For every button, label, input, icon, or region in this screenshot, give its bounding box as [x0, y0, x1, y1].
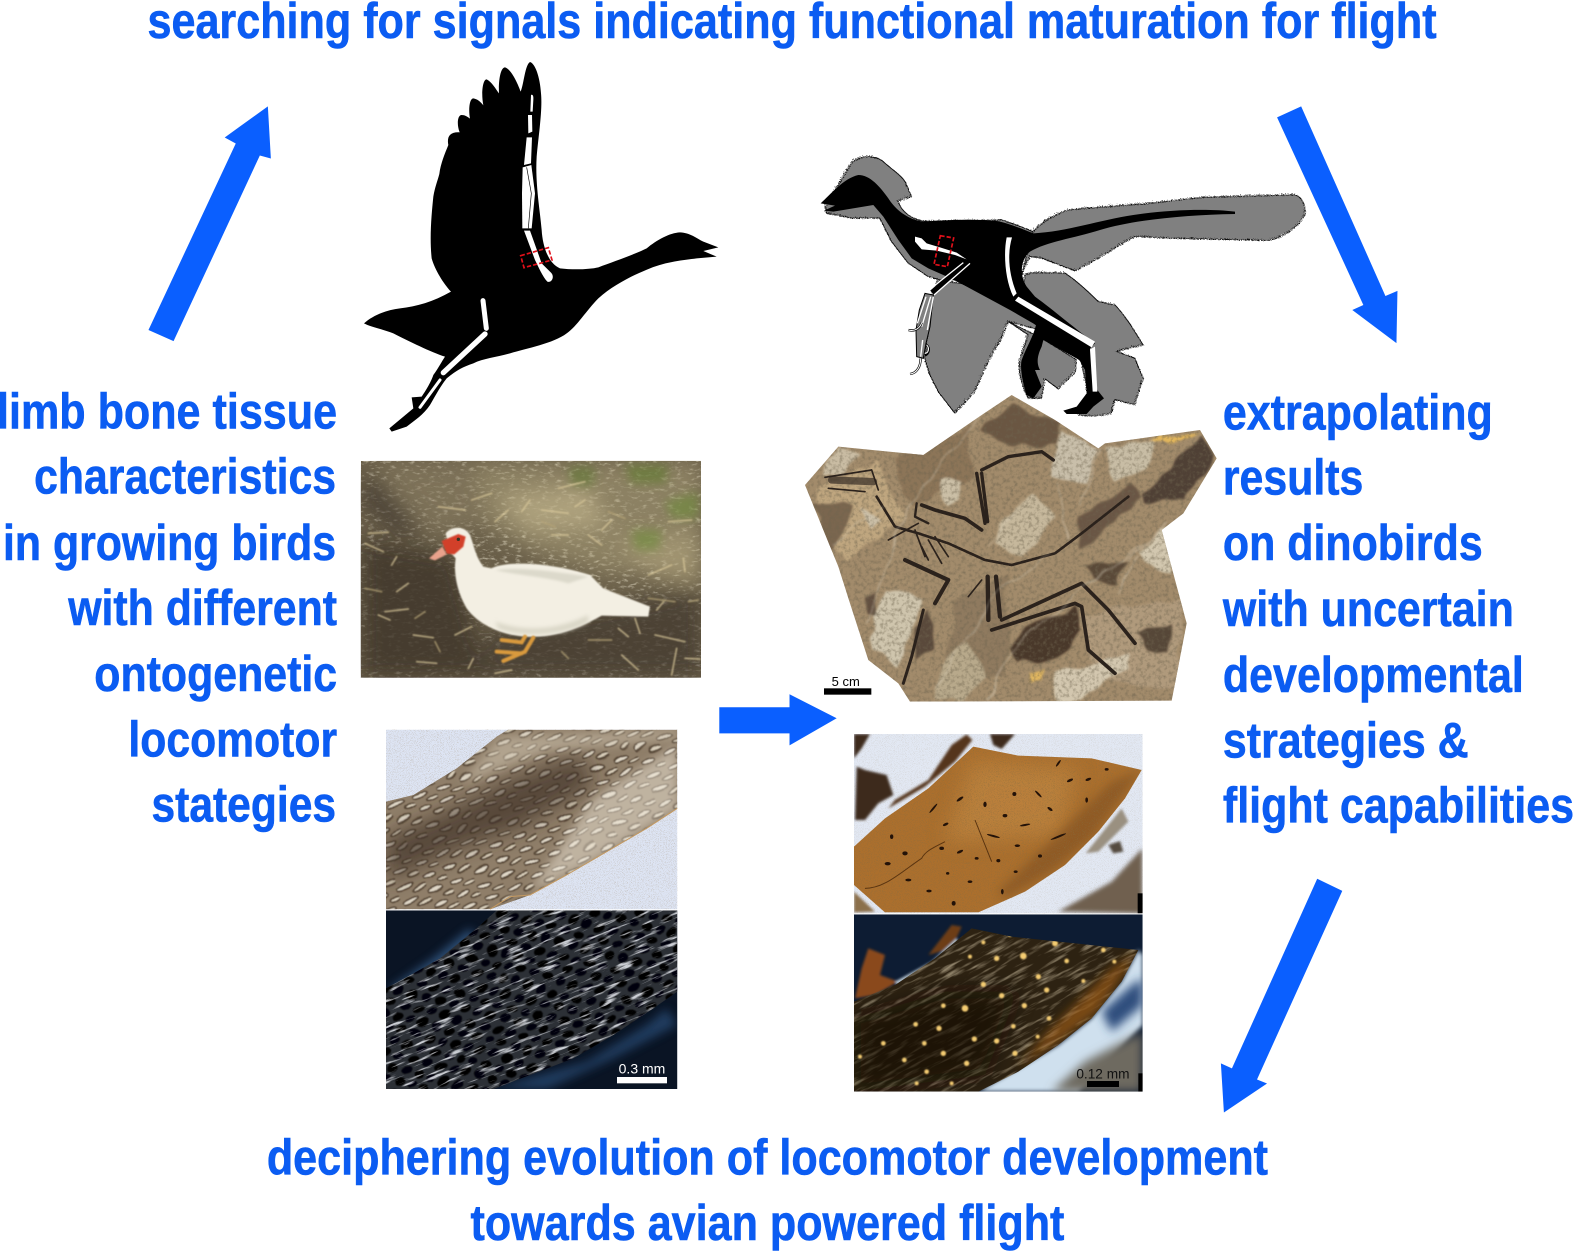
- left text block: with different: [67, 580, 337, 636]
- scale bar: 0.12 mm: [1076, 1066, 1129, 1081]
- scale bar: [617, 1064, 667, 1084]
- left text block: limb bone tissue: [0, 383, 337, 439]
- photo: muscovy duck: [361, 461, 702, 678]
- left text block: in growing birds: [3, 515, 336, 571]
- wing bone division: [527, 167, 531, 228]
- bone rim: [490, 808, 677, 909]
- left text block: locomotor: [128, 711, 337, 767]
- fossil skeleton: [825, 452, 1135, 683]
- arrow: down right: [1277, 106, 1397, 343]
- wing bones: [522, 95, 553, 282]
- right text block: strategies &: [1223, 712, 1469, 768]
- right text block: developmental: [1223, 647, 1524, 703]
- micrograph: dinobird bone, polarised light: [854, 914, 1143, 1092]
- scale bar: 5 cm: [832, 674, 860, 689]
- right text block: with uncertain: [1222, 581, 1514, 637]
- left text block: stategies: [151, 777, 336, 833]
- arm and hand: [908, 263, 970, 374]
- arrow: up right: [148, 106, 271, 341]
- black body: [821, 175, 1235, 414]
- arrow: down left: [1221, 879, 1342, 1113]
- scale bar: [824, 674, 871, 695]
- arrow: centre right: [719, 694, 837, 745]
- leg bones: [420, 301, 486, 407]
- micrograph: goose bone, plain light: [386, 730, 678, 910]
- micrograph: goose bone, polarised light: [386, 910, 678, 1089]
- feathers: [824, 155, 1304, 414]
- study area marker: [521, 248, 552, 268]
- dry straw: [365, 482, 700, 675]
- slab tonal patches: [815, 400, 1216, 700]
- bottom text block: [267, 1130, 1268, 1251]
- scale bar: 0.3 mm: [619, 1061, 665, 1077]
- duck: [429, 528, 650, 661]
- dinobird silhouette: [821, 155, 1304, 414]
- bottom text block: towards avian powered flight: [471, 1195, 1065, 1251]
- micrograph: dinobird bone, plain light: [854, 734, 1143, 913]
- bottom text block: deciphering evolution of locomotor development: [267, 1130, 1268, 1186]
- left text block: characteristics: [34, 449, 336, 505]
- study area marker: [934, 236, 954, 267]
- right text block: results: [1223, 450, 1363, 506]
- body bones: [915, 237, 1097, 392]
- scale bar: [1076, 1066, 1143, 1092]
- fossil slab with scale: [795, 390, 1222, 710]
- right text block: extrapolating: [1223, 384, 1493, 440]
- right text block: [1222, 384, 1573, 834]
- goose silhouette: [364, 62, 718, 432]
- goose body: [364, 62, 718, 432]
- left text block: [0, 383, 337, 833]
- left text block: ontogenetic: [94, 646, 337, 702]
- slab cracks: [835, 415, 1168, 700]
- ground light and shadow: [361, 462, 702, 678]
- right text block: on dinobirds: [1223, 515, 1483, 571]
